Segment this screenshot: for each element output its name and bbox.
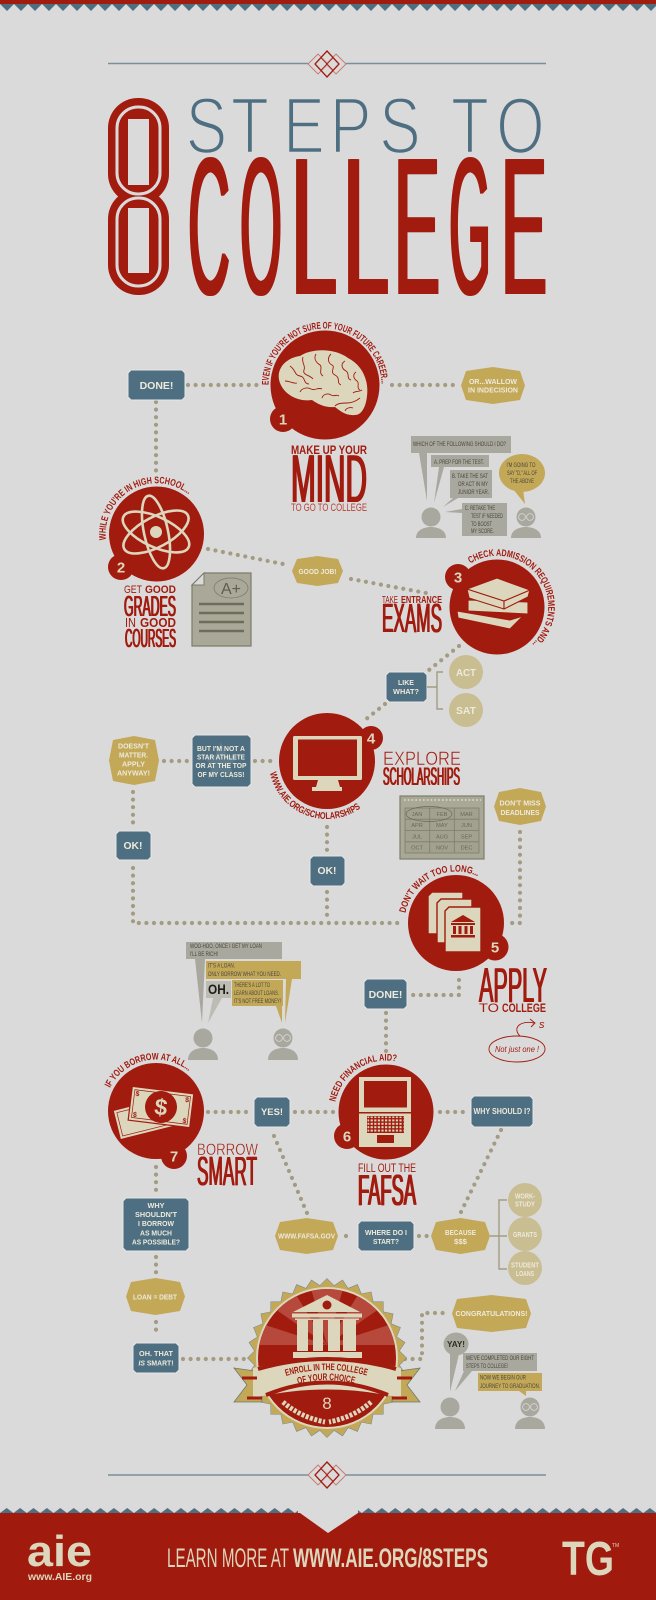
callout: congratulations: CONGRATULATIONS!	[456, 1309, 528, 1318]
step 1 circle: 1	[279, 412, 287, 428]
step 3 curved caption: CHECK ADMISSION REQUIREMENTS AND...	[468, 549, 555, 645]
step 2 panel: COURSES	[125, 623, 176, 653]
heading: apply to college: TO	[479, 1001, 499, 1015]
top ornament rule	[108, 51, 546, 77]
dialogue: which should I do: TO BOOST	[471, 521, 492, 528]
icon: calendar: JAN	[412, 812, 422, 818]
ribbon banner: ENROLL IN THE COLLEGE	[284, 1364, 368, 1376]
callout: or wallow in indecision	[461, 367, 525, 404]
dotted connector: step 2 to good job	[208, 549, 283, 564]
step 2 circle: 2	[117, 560, 125, 576]
button: why shouldn't i borrow: WHY	[148, 1201, 164, 1210]
icon: calendar: FEB	[437, 812, 448, 818]
option: work-study: WORK-	[515, 1193, 536, 1200]
heading: take entrance exams	[382, 595, 442, 641]
dotted connector: done to step 2	[154, 402, 158, 472]
option: grants: GRANTS	[513, 1232, 537, 1239]
dotted connector: why should i to because	[461, 1130, 501, 1212]
step 5 curved caption: DON'T WAIT TOO LONG...	[399, 864, 478, 913]
badge seal edge	[247, 1278, 407, 1438]
option: grants	[508, 1217, 542, 1251]
option: student loans: STUDENT	[511, 1263, 540, 1270]
icon: dollar bills: $	[153, 1093, 169, 1121]
step 2 panel: GRADES	[124, 591, 176, 623]
text: E	[501, 117, 547, 336]
footer link text: LEARN MORE AT	[167, 1543, 289, 1573]
icon: dollar bills: $	[185, 1097, 189, 1104]
title: 8	[106, 44, 171, 351]
annotation: not just one: s	[539, 1019, 545, 1031]
step 5 circle	[408, 875, 508, 971]
dialogue: yay: WE'VE COMPLETED OUR EIGHT	[466, 1355, 534, 1362]
bracket: aid options	[490, 1200, 507, 1269]
step 4 curved caption: WWW.AIE.ORG/SCHOLARSHIPS	[270, 771, 360, 819]
title	[106, 44, 547, 351]
icon: calendar: MAR	[460, 812, 473, 818]
dialogue: yay: JOURNEY TO GRADUATION.	[480, 1383, 540, 1390]
icon: calendar: DEC	[461, 846, 472, 852]
callout: because $$$: BECAUSE	[445, 1228, 476, 1237]
heading: fill out the fafsa: FILL OUT THE	[358, 1163, 416, 1175]
callout: doesn't matter: MATTER.	[119, 750, 148, 759]
dotted connector: yes to step 6	[295, 1110, 335, 1114]
icon: calendar: OCT	[411, 846, 423, 852]
step 3 circle	[445, 560, 544, 654]
dotted connector: athlete to doesn't matter	[164, 759, 188, 763]
title line: college: E	[394, 117, 440, 336]
dialogue: yay	[444, 1332, 542, 1396]
step number 8: 8	[322, 1394, 332, 1413]
heading: apply to college	[479, 959, 547, 1015]
icon: laptop	[359, 1077, 411, 1147]
callout: because $$$	[431, 1218, 490, 1254]
icon: dollar bills	[113, 1086, 194, 1140]
dialogue: borrowing is not free money: OH.	[208, 981, 229, 997]
dialogue: which should I do: OR ACT IN MY	[458, 481, 488, 488]
button: but i'm not a star athlete: OR AT THE TOP	[196, 761, 246, 770]
icon: atom	[117, 493, 195, 571]
step 3 circle: 3	[454, 570, 462, 586]
logo: aie: www.AIE.org	[27, 1572, 92, 1583]
button: but i'm not a star athlete: STAR ATHLETE	[197, 752, 245, 762]
logo: tg: TM	[612, 1543, 619, 1549]
step 8 badge	[233, 1278, 545, 1438]
icon: application documents	[428, 892, 481, 952]
callout: doesn't matter: APPLY	[122, 760, 145, 769]
button: why should i	[471, 1096, 533, 1127]
dialogue: borrowing is not free money: WOO-HOO, ONCE I GET MY LOAN	[190, 943, 262, 950]
option: work-study	[508, 1183, 542, 1217]
icon: computer monitor	[293, 736, 362, 791]
dotted connector: step 5 to done	[412, 980, 459, 995]
callout: or wallow in indecision: IN INDECISION	[468, 386, 518, 395]
button: ok center	[310, 856, 345, 886]
step 4 circle: 4	[367, 730, 376, 748]
callout: good job	[292, 556, 343, 586]
dotted connector: loan to smart	[154, 1322, 158, 1337]
dotted connector: step 4 to not an athlete	[255, 759, 273, 763]
icon: dollar bills: $	[132, 1112, 137, 1119]
callout: or wallow in indecision: OR...WALLOW	[469, 377, 518, 386]
dotted connector: step 4 to ok	[325, 827, 329, 850]
dialogue: which should I do: SAY "D," ALL OF	[507, 470, 537, 477]
heading: explore scholarships: EXPLORE	[383, 749, 461, 770]
step 4 panel	[109, 713, 546, 886]
footer band	[0, 1508, 656, 1600]
dialogue: which should I do: THE ABOVE	[510, 478, 534, 485]
title line: college: L	[343, 117, 389, 336]
button: why shouldn't i borrow: SHOULDN'T	[135, 1210, 177, 1219]
heading: make up your mind: MAKE UP YOUR	[291, 443, 367, 457]
step 5 circle: 5	[491, 940, 499, 956]
dotted connector: step 7 to why shouldn't	[154, 1167, 158, 1192]
button: why shouldn't i borrow: I BORROW	[138, 1219, 175, 1228]
icon: stack of books	[457, 578, 530, 629]
dotted connector: step 7 to yes	[208, 1110, 250, 1114]
callout: loan = debt	[126, 1278, 185, 1315]
dialogue: borrowing is not free money: LEARN ABOUT LOANS.	[234, 990, 279, 997]
callout: don't miss deadlines: DEADLINES	[500, 808, 540, 817]
step 7 circle	[108, 1063, 204, 1169]
button: done	[364, 979, 407, 1009]
step 2 circle	[108, 486, 204, 582]
button: done: DONE!	[369, 989, 402, 1001]
step 4 circle	[279, 713, 383, 809]
button: done	[128, 370, 185, 400]
button: why should i: WHY SHOULD I?	[474, 1107, 531, 1116]
button: where do i start	[358, 1221, 414, 1251]
heading: get good grades in good courses: GET	[124, 584, 142, 596]
annotation: not just one: Not just one !	[495, 1045, 540, 1054]
callout: loan = debt: LOAN = DEBT	[133, 1292, 177, 1301]
dialogue: yay: YAY!	[447, 1339, 465, 1349]
icon: person	[188, 1028, 218, 1060]
button: oh that is smart: IS SMART!	[138, 1359, 174, 1368]
icon: calendar: SEP	[461, 834, 472, 840]
laurel	[283, 1402, 371, 1422]
badge disc	[250, 1285, 404, 1429]
button: oh that is smart	[133, 1343, 179, 1373]
button: but i'm not a star athlete	[192, 735, 251, 787]
dotted connector: like what to step 4	[365, 704, 385, 720]
title line: college: L	[291, 117, 337, 336]
callout: doesn't matter: DOESN'T	[118, 741, 149, 750]
callout: doesn't matter	[109, 736, 159, 785]
icon: calendar: JUN	[461, 823, 472, 829]
ribbon tails	[234, 1368, 420, 1402]
button: but i'm not a star athlete: OF MY CLASS!	[198, 770, 244, 779]
icon: calendar: NOV	[436, 846, 448, 852]
option: work-study: STUDY	[515, 1202, 535, 1209]
dotted connector: step 6 to why should i	[440, 1110, 467, 1114]
step 7 curved caption: IF YOU BORROW AT ALL...	[104, 1052, 189, 1088]
button: like what: LIKE	[398, 678, 414, 687]
text: SMART	[197, 1148, 257, 1194]
icon: college building	[292, 1295, 362, 1358]
dotted connector: step 8 to congratulations	[405, 1313, 445, 1359]
heading: borrow smart: BORROW	[197, 1140, 258, 1159]
step 2 curved caption: WHILE YOU'RE IN HIGH SCHOOL...	[98, 476, 189, 540]
dotted connector: fafsa.gov to where	[346, 1234, 353, 1238]
heading: get good grades in good courses	[124, 584, 176, 653]
ribbon banner	[242, 1357, 412, 1400]
footer link text: WWW.AIE.ORG/8STEPS	[293, 1543, 488, 1573]
callout: because $$$: $$$	[454, 1237, 468, 1246]
dialogue: which should I do: TEST IF NEEDED	[471, 513, 503, 520]
bracket: exam options	[427, 672, 443, 709]
button: why shouldn't i borrow	[123, 1198, 189, 1251]
dialogue: yay: STEPS TO COLLEGE!	[466, 1363, 508, 1370]
heading: fill out the fafsa	[358, 1163, 416, 1215]
step 1 panel	[128, 322, 545, 538]
heading: get good grades in good courses: GOOD	[140, 615, 176, 630]
dotted connector: done to step 1	[188, 383, 260, 387]
title line: college: G	[449, 117, 491, 336]
dialogue: which should I do: MY SCORE.	[471, 528, 494, 535]
icon: calendar	[400, 796, 484, 859]
top zigzag band	[0, 0, 656, 11]
step 3 panel: EXAMS	[382, 595, 442, 641]
icon: calendar: JUL	[412, 834, 422, 840]
step 6 circle	[334, 1064, 434, 1160]
step 6 panel	[254, 1054, 542, 1285]
text: APPLY	[479, 959, 547, 1013]
dialogue: borrowing is not free money: ONLY BORROW WHAT YOU NEED.	[208, 971, 281, 978]
option: student loans	[508, 1251, 542, 1285]
icon: dollar bills: $	[182, 1118, 187, 1125]
dialogue: borrowing is not free money: THERE'S A LOT TO	[234, 982, 270, 989]
dotted connector: step 1 to wallow	[392, 383, 455, 387]
dialogue: yay: NOW WE BEGIN OUR	[480, 1374, 526, 1382]
callout: doesn't matter: ANYWAY!	[117, 769, 150, 778]
callout: www.fafsa.gov	[275, 1218, 338, 1254]
icon: calendar: APR	[411, 823, 423, 829]
heading: apply to college: COLLEGE	[502, 1001, 546, 1015]
button: where do i start: WHERE DO I	[365, 1228, 407, 1237]
callout: don't miss deadlines: DON'T MISS	[500, 799, 540, 808]
icon: person with glasses	[268, 1028, 298, 1060]
icon: graded paper: A+	[221, 581, 241, 598]
icon: calendar: AUG	[436, 834, 448, 840]
button: ok center: OK!	[318, 865, 336, 877]
option: act: ACT	[456, 668, 476, 679]
heading: get good grades in good courses: GOOD	[145, 584, 176, 596]
step 6 circle: 6	[343, 1128, 351, 1146]
icon: person with glasses	[511, 508, 541, 538]
button: like what	[386, 672, 427, 702]
dotted connector: step 3 to like what	[429, 646, 459, 670]
step 4 panel: SCHOLARSHIPS	[383, 763, 460, 791]
ribbon banner: OF YOUR CHOICE	[297, 1373, 356, 1384]
button: done: DONE!	[140, 380, 173, 392]
button: where do i start: START?	[373, 1237, 399, 1246]
dialogue: which should I do: WHICH OF THE FOLLOWING SHOULD I DO?	[413, 441, 506, 448]
button: like what: WHAT?	[393, 687, 419, 696]
step 3 panel	[382, 549, 555, 727]
icon: brain	[279, 350, 367, 415]
icon: person	[416, 508, 446, 538]
step 2 panel	[98, 476, 343, 653]
dotted connector: where to because	[419, 1234, 427, 1238]
dotted connector: doesn't matter to ok	[131, 792, 135, 823]
icon: dollar bills: $	[135, 1091, 140, 1098]
dotted connector: good job to step 3	[351, 579, 426, 593]
annotation: not just one	[489, 1019, 545, 1062]
button: oh that is smart: OH. THAT	[139, 1349, 173, 1358]
button: ok left: OK!	[124, 840, 142, 852]
dialogue: borrowing is not free money	[186, 942, 301, 1023]
dialogue: which should I do: JUNIOR YEAR.	[458, 489, 489, 496]
logo: aie: aie	[27, 1527, 92, 1576]
button: why shouldn't i borrow: AS MUCH	[140, 1228, 172, 1237]
icon: person	[435, 1398, 465, 1429]
title line: college: O	[240, 117, 282, 336]
step 6 curved caption: NEED FINANCIAL AID?	[329, 1054, 397, 1102]
option: student loans: LOANS	[516, 1271, 534, 1278]
icon: person with glasses	[515, 1398, 545, 1429]
logo: tg: TG	[562, 1533, 614, 1586]
dotted connector: ok to baseline	[325, 892, 329, 915]
option: act	[449, 655, 483, 689]
dialogue: which should I do: I'M GOING TO	[506, 462, 536, 469]
step 7 circle: 7	[170, 1148, 178, 1166]
dotted connector: yes to fafsa.gov	[274, 1136, 307, 1213]
option: sat: SAT	[456, 706, 476, 717]
dotted connector: ok to step 5	[133, 868, 398, 923]
heading: make up your mind: TO GO TO COLLEGE	[291, 502, 367, 514]
heading: explore scholarships	[383, 749, 461, 791]
callout: congratulations	[452, 1295, 531, 1332]
dialogue: borrowing is not free money: IT'S A LOAN.	[208, 962, 235, 970]
step 7 panel	[104, 1052, 258, 1374]
step 1 panel: MIND	[291, 441, 367, 517]
icon: calendar: MAY	[436, 823, 448, 829]
dotted connector: smart to step 8	[183, 1357, 245, 1361]
dialogue: which should I do: A. PREP FOR THE TEST.	[434, 459, 484, 466]
button: yes	[254, 1097, 290, 1127]
dialogue: borrowing is not free money: I'LL BE RICH!	[190, 951, 218, 958]
dotted connector: why shouldn't to loan	[154, 1257, 158, 1273]
heading: borrow smart	[197, 1140, 258, 1194]
dotted connector: done to step 6	[384, 1013, 388, 1052]
dotted connector: deadlines to step 5	[512, 832, 520, 923]
callout: don't miss deadlines	[494, 788, 546, 825]
step 1 curved caption: EVEN IF YOU'RE NOT SURE OF YOUR FUTURE CAREER...	[262, 322, 388, 385]
button: why shouldn't i borrow: AS POSSIBLE?	[132, 1238, 180, 1247]
callout: www.fafsa.gov: WWW.FAFSA.GOV	[278, 1232, 336, 1240]
step 1 circle	[270, 330, 380, 440]
icon: graded paper	[192, 573, 251, 646]
title line: steps to: STEPS TO	[186, 82, 545, 171]
button: ok left	[116, 831, 151, 860]
button: yes: YES!	[261, 1107, 283, 1118]
step 6 panel: FAFSA	[358, 1166, 416, 1215]
heading: take entrance exams: ENTRANCE	[401, 595, 442, 606]
dialogue: borrowing is not free money: IT'S NOT FREE MONEY!	[234, 998, 281, 1005]
heading: make up your mind	[291, 441, 367, 517]
bottom ornament rule	[108, 1462, 546, 1488]
title numeral 8	[106, 44, 171, 351]
title line: college: C	[188, 117, 230, 336]
step 5 panel	[186, 864, 547, 1062]
button: but i'm not a star athlete: BUT I'M NOT A	[197, 744, 245, 753]
dialogue: which should I do	[411, 436, 545, 536]
heading: get good grades in good courses: IN	[125, 615, 136, 630]
option: sat	[449, 693, 483, 727]
callout: good job: GOOD JOB!	[298, 567, 336, 576]
dialogue: which should I do: B. TAKE THE SAT	[452, 473, 488, 480]
heading: take entrance exams: TAKE	[382, 595, 398, 606]
dialogue: which should I do: C. RETAKE THE	[465, 505, 495, 512]
